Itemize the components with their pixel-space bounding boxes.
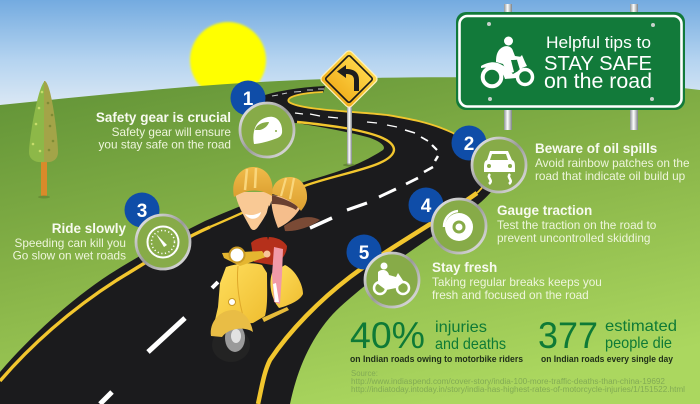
tip 1: safety gear — [96, 80, 294, 157]
front wheel — [212, 324, 250, 362]
female face — [271, 195, 304, 228]
female hair fringe — [272, 195, 298, 210]
stat: 377: on Indian roads every single day — [541, 354, 674, 365]
sign title text — [544, 34, 652, 93]
road right edge line, far section — [288, 92, 487, 193]
icon: car skidding — [472, 138, 526, 192]
badge 2 — [452, 126, 486, 160]
source citations: http://indiatoday.intoday.in/story/india-has-highest-rates-of-motorcycle-injuries/1/151522.html — [351, 385, 685, 394]
small front lamp — [228, 298, 236, 306]
tip 2 text: road that indicate oil build up — [535, 169, 686, 183]
badge 1: 1 — [243, 89, 254, 110]
tip 5 text: Taking regular breaks keeps you — [432, 275, 602, 289]
sun — [190, 22, 266, 98]
sign title text: STAY SAFE — [544, 53, 652, 75]
stat: 377 — [538, 314, 677, 365]
stat: 377: people die — [605, 335, 672, 352]
riders on yellow scooter — [211, 167, 320, 362]
stat: 40% — [350, 314, 523, 365]
tip 4 text: prevent uncontrolled skidding — [497, 231, 650, 245]
gap between faces — [266, 205, 271, 240]
badge 5 — [346, 234, 382, 270]
icon: speedometer — [136, 215, 190, 269]
tip 1 text: Safety gear is crucial — [96, 110, 231, 125]
tip 4 text: Test the traction on the road to — [497, 218, 657, 232]
handlebar — [222, 251, 266, 266]
stat: 40%: and deaths — [435, 336, 506, 353]
icon: resting motorcyclist — [365, 253, 419, 307]
male helmet — [233, 167, 273, 197]
curve warning road sign — [319, 49, 379, 166]
icon: brake disc — [432, 199, 486, 253]
road centre dashes — [100, 113, 438, 404]
male face — [235, 192, 272, 230]
badge 2: 2 — [464, 134, 474, 155]
sign title text: Helpful tips to — [546, 34, 651, 52]
green sign: helpful tips — [456, 4, 685, 130]
badge 3 — [124, 192, 160, 228]
red jacket body — [251, 237, 287, 265]
sign title text: on the road — [544, 70, 652, 93]
tip 5 text: Stay fresh — [432, 260, 497, 275]
tip 3 text: Ride slowly — [52, 221, 126, 236]
stat: 40%: injuries — [435, 319, 487, 336]
source citations — [351, 369, 685, 394]
tip 2: oil spills — [452, 126, 690, 192]
sky background — [0, 0, 700, 110]
tip 4: gauge traction — [408, 188, 657, 253]
tip 4 text — [497, 203, 657, 245]
source citations: http://www.indiaspend.com/cover-story/india-100-more-traffic-deaths-than-china-19692 — [351, 377, 665, 386]
tip 1 text: you stay safe on the road — [99, 138, 231, 152]
stat: 377: estimated — [605, 318, 677, 335]
stat: 377: 377 — [538, 314, 598, 356]
tip 4 text: Gauge traction — [497, 203, 592, 218]
tree — [29, 81, 58, 198]
tip 5 text — [432, 260, 602, 302]
badge 1 — [230, 80, 266, 116]
tip 3 text: Speeding can kill you — [14, 236, 126, 250]
scooter main body — [215, 263, 267, 323]
headlight — [230, 248, 244, 262]
road right edge line, near section — [258, 193, 477, 404]
rear cowl — [270, 265, 303, 308]
female rider pink leg — [272, 247, 283, 304]
badge 5: 5 — [359, 243, 370, 264]
badge 4: 4 — [421, 196, 432, 217]
tip 5: stay fresh — [346, 234, 602, 307]
white sock — [273, 283, 279, 302]
tip 5 text: fresh and focused on the road — [432, 288, 589, 302]
road left edge line, far section — [210, 122, 394, 227]
tip 2 text: Avoid rainbow patches on the — [535, 156, 690, 170]
icon: helmet — [240, 103, 294, 157]
male smile — [245, 212, 261, 219]
ponytail hair — [284, 217, 320, 231]
hands — [264, 250, 270, 258]
icon: motorbike rider — [481, 36, 532, 86]
badge 3: 3 — [137, 201, 147, 222]
tip 3 text — [13, 221, 126, 262]
source citations: Source: — [351, 369, 378, 378]
female helmet — [272, 177, 307, 211]
stat: 40%: 40% — [350, 314, 425, 356]
stat: 40%: on Indian roads owing to motorbike riders — [350, 354, 523, 365]
badge 4 — [408, 188, 444, 222]
tip 2 text: Beware of oil spills — [535, 141, 657, 156]
tip 1 text — [96, 110, 231, 152]
footboard — [262, 307, 289, 322]
road left edge line, near section — [0, 227, 210, 381]
tip 2 text — [535, 141, 690, 183]
tip 3 text: Go slow on wet roads — [13, 248, 126, 262]
winding road — [0, 86, 498, 404]
tip 3: ride slowly — [13, 192, 190, 269]
front mudguard — [211, 310, 253, 337]
tip 1 text: Safety gear will ensure — [112, 125, 231, 139]
